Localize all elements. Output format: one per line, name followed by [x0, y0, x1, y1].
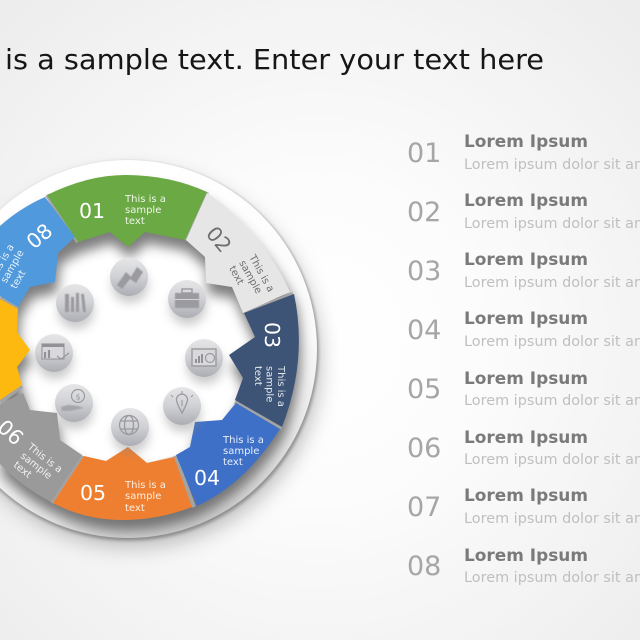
segment 03 navy: sample [264, 366, 274, 402]
segment 06 grey: text [11, 460, 33, 481]
segment 08 blue: text [9, 268, 28, 291]
list: item 01: Lorem Ipsum [464, 132, 588, 151]
list: item 07: 07 [407, 492, 441, 523]
icon: light bulb [163, 387, 201, 432]
list: item 07: Lorem Ipsum [464, 486, 588, 505]
list: item 06: 06 [407, 433, 441, 464]
list: item 02: 02 [407, 197, 441, 228]
segment 01 green: 01 [79, 199, 105, 223]
gap strips between segments [0, 192, 293, 507]
segment 06 grey [0, 393, 82, 502]
icon: books [56, 284, 94, 329]
list: item 01: 01 [407, 138, 441, 169]
segment 05 orange: This is a [124, 480, 166, 491]
segment 03 navy: text [252, 366, 263, 386]
icon: dashboard [185, 339, 223, 384]
list: item 05: 05 [407, 374, 441, 405]
list: item 08: 08 [407, 551, 441, 582]
outer white disc [0, 160, 317, 538]
list: item 04 [407, 309, 640, 350]
segment 03 navy: 03 [260, 322, 284, 348]
segment 02 light grey: text [226, 264, 245, 287]
icon: report chart [35, 334, 73, 379]
segment 06 grey: This is a [24, 441, 64, 476]
icon: briefcase [168, 280, 206, 325]
segment 05 orange: 05 [80, 481, 106, 505]
list: item 06: Lorem Ipsum [464, 428, 588, 447]
list: item 02 [407, 191, 640, 232]
segment 02 light grey: This is a [246, 252, 276, 294]
segment 03 navy: This is a [275, 365, 286, 407]
list: item 07 [407, 486, 640, 527]
central white hub [17, 232, 255, 463]
icon: coin in hand [55, 384, 93, 429]
segment 02 light grey [186, 193, 290, 313]
segment 04 blue: This is a [222, 435, 264, 446]
icon: coin in hand: $ [75, 392, 81, 402]
segment 01 green: sample [125, 205, 161, 216]
list: item 02: Lorem Ipsum [464, 191, 588, 210]
segment 05 orange: text [125, 503, 145, 514]
segment 08 blue [0, 197, 75, 307]
list: item 04: Lorem Ipsum [464, 309, 588, 328]
circular diagram [0, 160, 321, 548]
list: item 08 [407, 546, 640, 586]
segment 03 navy [229, 294, 299, 427]
segment 08 blue: 08 [22, 219, 57, 254]
list: item 05 [407, 369, 640, 409]
segment 04 blue [176, 403, 280, 506]
segment 02 light grey: 02 [201, 222, 236, 257]
list: item 08: Lorem Ipsum [464, 546, 588, 565]
segment 04 blue: text [223, 457, 243, 468]
segment 05 orange [53, 447, 192, 520]
list: item 04: 04 [407, 315, 441, 346]
segment cast shadow [2, 186, 301, 531]
list: item 01 [407, 132, 640, 173]
list: item 03: 03 [407, 256, 441, 287]
segment 02 light grey: sample [236, 259, 264, 296]
icon: globe [111, 408, 149, 453]
segment 04 blue: sample [223, 446, 259, 457]
disc soft drop shadow [0, 172, 321, 548]
segment 01 green: This is a [124, 194, 166, 205]
list: item 05: Lorem Ipsum [464, 369, 588, 388]
disc dark edge [0, 162, 318, 540]
icon: handshake [110, 258, 148, 303]
list: item 06 [407, 428, 640, 468]
segment 06 grey: sample [18, 451, 53, 482]
segment 04 blue: 04 [194, 466, 220, 490]
list: item 03 [407, 250, 640, 291]
segment 01 green [47, 175, 207, 247]
list: item 03: Lorem Ipsum [464, 250, 588, 269]
segment 07 yellow [0, 299, 30, 400]
title: is a sample text. Enter your text here [5, 44, 544, 76]
segment 05 orange: sample [125, 491, 161, 502]
segment 01 green: text [125, 216, 145, 227]
